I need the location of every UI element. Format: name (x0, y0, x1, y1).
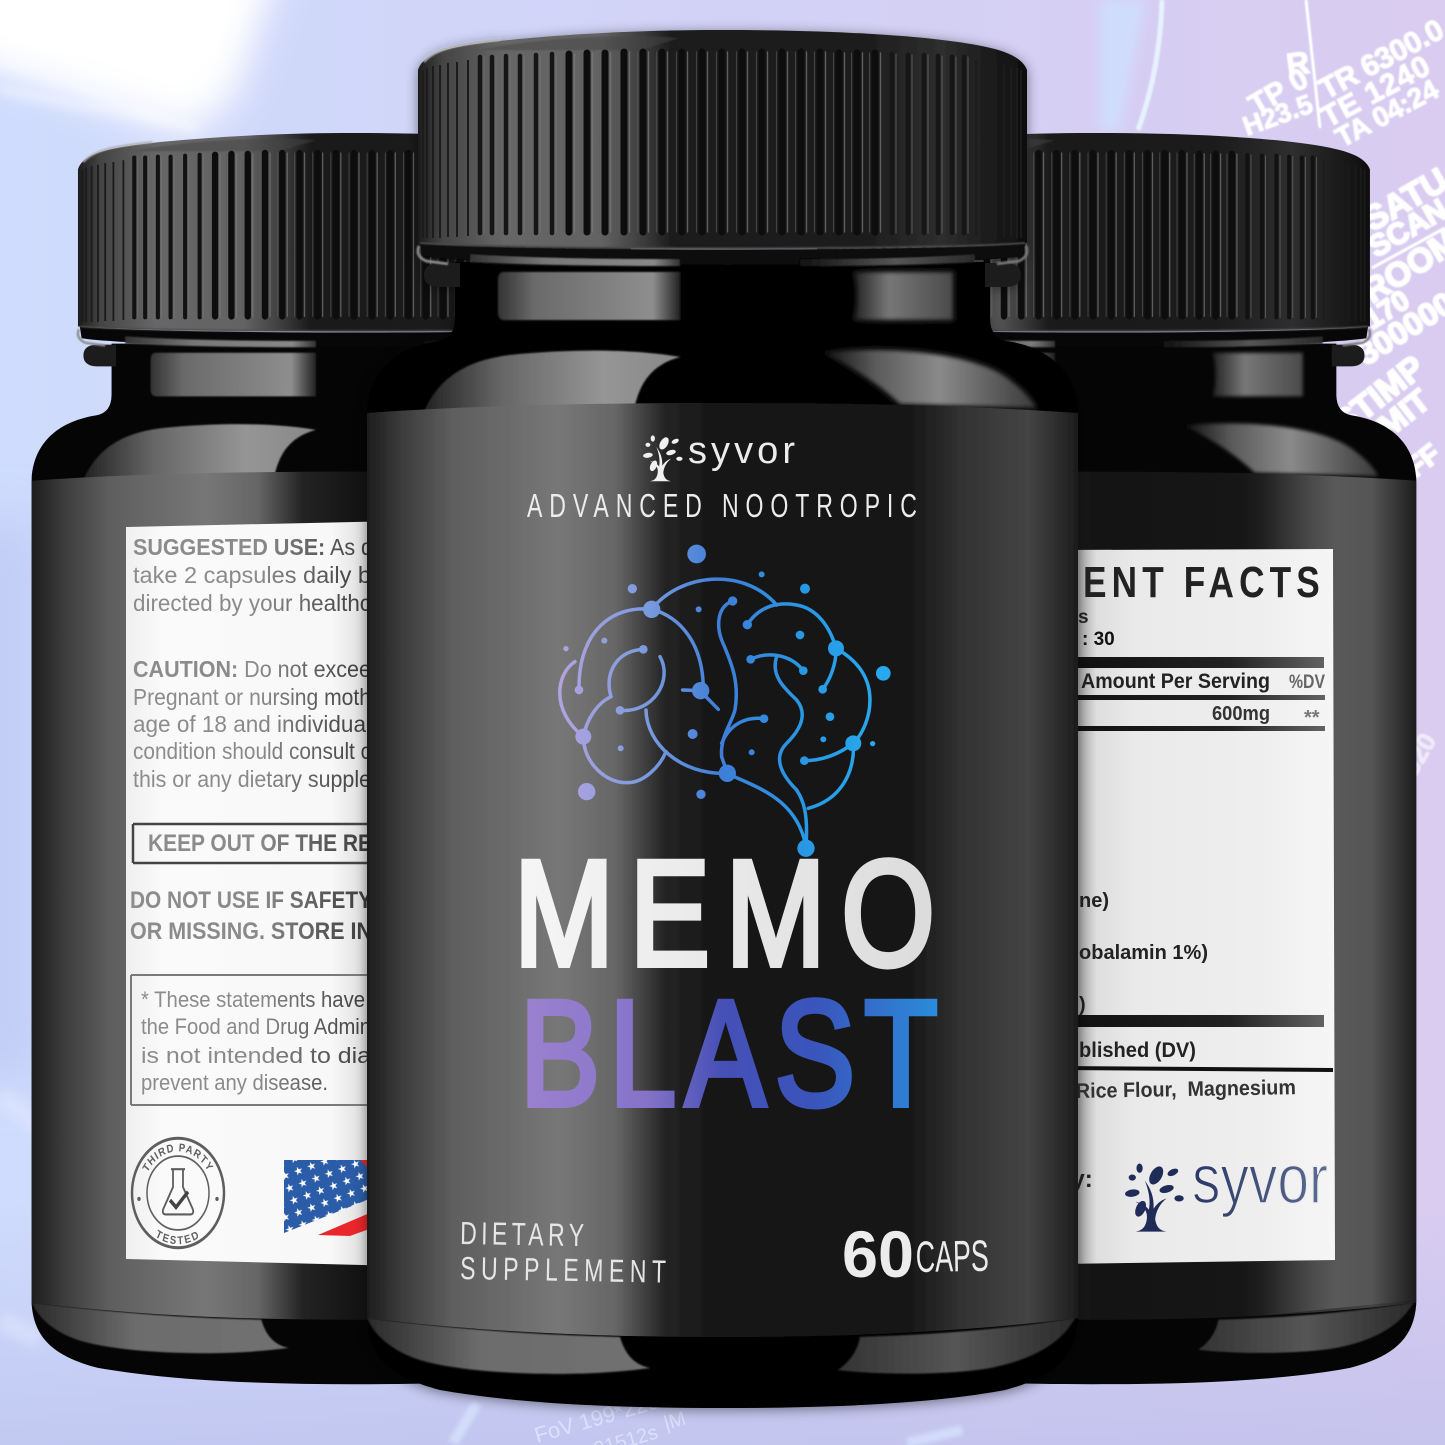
logo: syvor dark: syvor (1192, 1140, 1328, 1218)
background scan text, upper right (1239, 0, 1445, 783)
left bottle: back label: take 2 capsules daily b (133, 562, 371, 588)
background scan text, upper right: H23.5 (1239, 89, 1317, 142)
badge: third party tested: TESTED (157, 1230, 198, 1244)
right bottle: supplement facts label: blished (DV) (1079, 1039, 1196, 1062)
left bottle: back label: this or any dietary supple (133, 766, 371, 792)
right bottle: supplement facts label: ENT FACTS (1083, 558, 1320, 607)
left bottle: back label: directed by your healthc (133, 590, 371, 616)
left bottle: back label (31, 133, 631, 1384)
left bottle: back label: Pregnant or nursing moth (133, 684, 371, 710)
right bottle: supplement facts label: 600mg (1212, 703, 1270, 725)
right bottle: supplement facts label: obalamin 1%) (1079, 942, 1208, 964)
left bottle: back label: KEEP OUT OF THE RE (148, 830, 372, 857)
left bottle: back label: condition should consult c (133, 738, 371, 764)
text: 60 caps: CAPS (915, 1232, 989, 1282)
right bottle: supplement facts label: Rice Flour, Magnesium (1076, 1076, 1296, 1103)
logo: syvor white (643, 430, 795, 481)
right bottle: supplement facts label: ne) (1079, 890, 1109, 912)
background scan text, upper right: R (1284, 44, 1312, 83)
right bottle: supplement facts label: : 30 (1082, 629, 1115, 650)
right bottle: supplement facts label: ) (1079, 994, 1086, 1016)
title: MEMO: MEMO (514, 829, 935, 997)
background scan text, upper right: STIMP (1327, 348, 1432, 442)
right bottle: supplement facts label: Amount Per Serving (1081, 670, 1270, 693)
right bottle: supplement facts label: s (1078, 607, 1089, 628)
left bottle: back label: age of 18 and individual (133, 711, 371, 737)
icon: brain network (560, 545, 891, 857)
center bottle (367, 30, 1078, 1408)
background scan text, upper right: TP 0 (1243, 62, 1314, 122)
left bottle: back label: the Food and Drug Admin (141, 1014, 371, 1039)
text: dietary supplement: SUPPLEMENT (460, 1250, 666, 1289)
right bottle: supplement facts label (771, 133, 1416, 1384)
background scan text, upper right: S20 (1393, 728, 1442, 783)
left bottle: back label: OR MISSING. STORE IN (130, 918, 372, 945)
left bottle: back label: * These statements have (141, 987, 365, 1012)
background scan text, upper right: TE 1240 (1316, 50, 1435, 134)
title: BLAST: BLAST (520, 969, 938, 1137)
background scan text, upper right: OFF (1383, 438, 1445, 497)
left bottle: back label: SUGGESTED USE: As d (133, 534, 373, 560)
right bottle: supplement facts label: %DV (1289, 672, 1325, 693)
left bottle: back label: prevent any disease. (141, 1070, 328, 1095)
background scan text, upper right: 170 (1359, 284, 1415, 335)
icon: american flag (284, 1160, 372, 1236)
text: 60 caps (842, 1217, 989, 1291)
left bottle: back label: DO NOT USE IF SAFETY (130, 887, 372, 914)
background scan text, upper right: TA 04:24 (1330, 73, 1444, 153)
text: advanced nootropic: ADVANCED NOOTROPIC (527, 488, 917, 525)
badge: third party tested: THIRD PARTY (142, 1144, 214, 1170)
logo: syvor dark (1125, 1140, 1328, 1232)
right bottle: supplement facts label: ry: (1062, 1166, 1093, 1193)
right bottle: supplement facts label: ** (1304, 707, 1320, 729)
text: dietary supplement (460, 1215, 666, 1289)
left bottle: back label: CAUTION: Do not excee (133, 656, 371, 682)
background scan text, bottom: |M (661, 1408, 688, 1435)
logo: syvor white: syvor (688, 430, 795, 472)
background scan text, upper right: SMIT (1354, 382, 1437, 458)
badge: third party tested (130, 1136, 226, 1250)
left bottle: back label: is not intended to dia (141, 1043, 372, 1068)
text: dietary supplement: DIETARY (460, 1215, 584, 1253)
text: 60 caps: 60 (842, 1217, 914, 1291)
